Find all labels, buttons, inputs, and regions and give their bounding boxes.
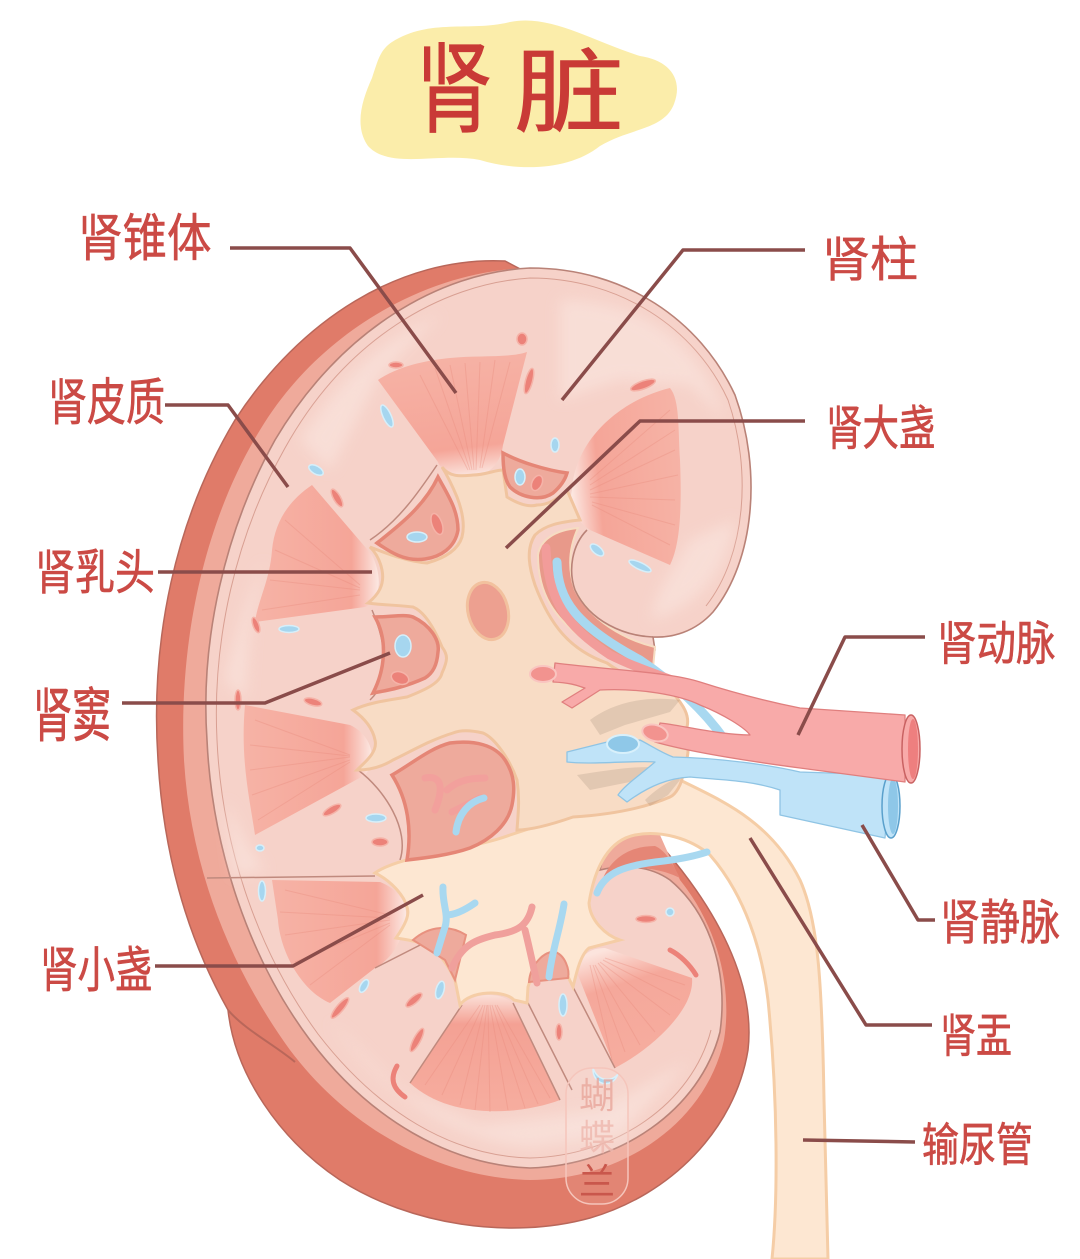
vessels inside bottom calyx [425,777,485,812]
pyramid: left lower [244,705,372,835]
hilum red band under ureter [603,846,680,878]
label: 肾大盏: 肾大盏 [826,402,935,455]
label: 肾小盏 [40,895,423,998]
pyramid striations: bottom [425,1005,550,1112]
renal sinus [353,467,688,830]
bottom calyx blue vessel [456,798,484,832]
artery opening: lower branch [640,722,670,744]
label: 肾静脉 [862,825,1060,950]
vein opening: main [882,774,900,838]
lower calyx blue vessel left [437,887,475,953]
minor calyx: top left [377,477,458,560]
vein lumen [888,778,898,834]
cortex inner contour [216,278,742,1158]
minor calyx: left [373,616,438,693]
title: 脏 [514,43,624,144]
label: 肾静脉: 肾静脉 [940,897,1060,950]
title [416,34,624,145]
label: 肾盂 [750,838,1012,1062]
pale fat band [183,268,726,1180]
minor calyx: bottom [392,742,514,860]
renal cortex [206,268,751,1168]
vessel: pink curved branch [546,548,710,695]
pyramid striations: lower left [280,890,390,985]
watermark seal: 蝴 [579,1075,615,1116]
renal pelvis opening [462,578,514,644]
pale cortex mottling [225,300,735,1148]
label: 肾锥体: 肾锥体 [78,211,211,268]
vein opening: branch [607,735,639,753]
pyramid: right [571,388,681,565]
lower minor calyx right [529,952,568,982]
lower minor calyx islands [413,928,466,980]
title: 肾 [416,34,492,145]
pyramid striations: bottom right [590,958,685,1060]
renal artery [530,663,920,783]
label: 肾皮质: 肾皮质 [48,374,165,431]
label: 肾动脉 [798,619,1055,735]
artery lumen [908,719,918,779]
watermark seal [566,1068,628,1204]
vessel: blue curved branch [557,562,725,740]
lower right lobe outline [572,530,653,637]
label: 肾乳头: 肾乳头 [35,547,155,600]
pyramid striations: right [590,410,678,545]
watermark seal: 兰 [579,1161,615,1202]
pyramid striations: left [250,520,360,820]
label: 肾柱 [562,234,918,400]
pyramid: lower left [272,880,406,1003]
pyramid striations: top [420,360,510,470]
label: 肾锥体 [78,211,456,393]
label: 肾窦: 肾窦 [33,683,111,749]
renal vein [567,735,900,838]
artery opening: main [902,715,920,783]
lower blue vessel to hilum [597,852,707,893]
label: 肾大盏 [506,402,935,548]
pyramid: left upper [255,485,379,622]
hilum tissue band [538,528,655,668]
ureter and lower sinus [375,780,828,1259]
outer capsule [157,261,749,1228]
artery opening: upper branch [530,666,556,682]
label: 肾小盏: 肾小盏 [40,944,152,998]
lower calyx blue vessel right [549,904,564,977]
label: 肾窦 [33,653,390,749]
small vessels: red [235,333,696,1097]
label: 肾柱: 肾柱 [822,234,918,287]
column boundaries [207,465,615,1100]
minor calyx: top centre [503,453,567,498]
pyramid: bottom [410,995,560,1111]
label: 肾盂: 肾盂 [940,1009,1012,1062]
label: 肾皮质 [48,374,288,487]
pyramid: bottom right [578,948,692,1068]
label: 肾动脉: 肾动脉 [937,619,1055,671]
kidney [157,261,920,1259]
vessel shadows [577,699,680,806]
watermark seal: 蝶 [579,1117,615,1158]
small vessels: blue [256,403,674,1084]
capsule fold line [228,1010,295,1062]
title background blob [360,21,677,167]
lower calyx pink vessel [452,907,537,983]
pyramid: top [378,352,527,476]
label: 输尿管: 输尿管 [922,1119,1033,1171]
